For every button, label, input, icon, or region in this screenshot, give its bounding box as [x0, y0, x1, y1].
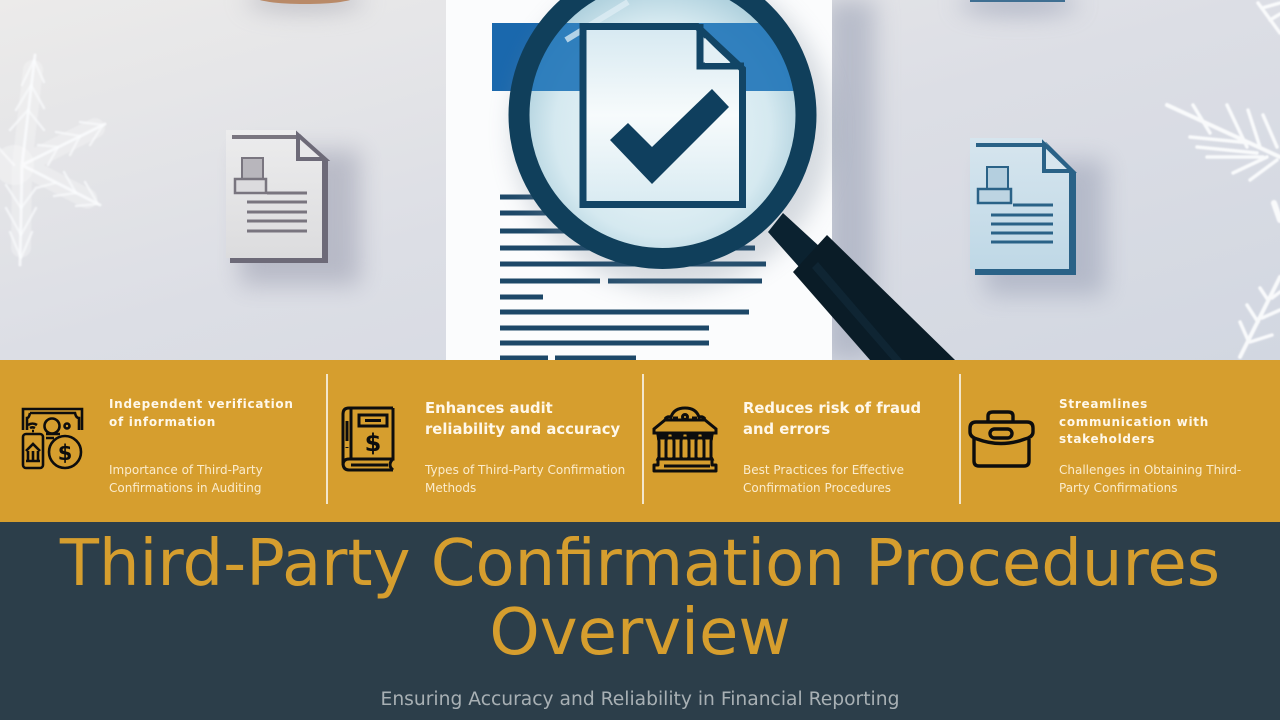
- card 4 heading: stakeholders: [1059, 432, 1155, 446]
- card 1 heading: [109, 397, 294, 428]
- card 4 description: Challenges in Obtaining Third-: [1059, 463, 1241, 477]
- magnifying glass: [500, 0, 955, 360]
- card 2 heading: [425, 400, 620, 438]
- icon: ledger book with dollar: [342, 406, 394, 472]
- card 2 heading: reliability and accuracy: [425, 421, 620, 438]
- card 2 description: Types of Third-Party Confirmation: [425, 463, 625, 477]
- card 3 description: Confirmation Procedures: [743, 481, 891, 495]
- title: Overview: [489, 596, 791, 670]
- divider 3: [959, 374, 961, 504]
- paper shadow: [825, 0, 875, 360]
- card 1 description: [109, 463, 263, 495]
- icon: money, phone and coin: $: [58, 441, 72, 465]
- card 3 description: Best Practices for Effective: [743, 463, 904, 477]
- central report page: [446, 0, 832, 360]
- card 3 heading: [743, 400, 921, 438]
- card 4 heading: communication with: [1059, 414, 1209, 428]
- card 3 description: [743, 463, 904, 495]
- icon: money, phone and coin: [22, 408, 84, 470]
- check mark: [610, 89, 729, 184]
- icon: ledger book with dollar: $: [365, 429, 381, 457]
- panel: title band: [0, 522, 1280, 720]
- card 3 heading: Reduces risk of fraud: [743, 400, 921, 417]
- card 4 heading: Streamlines: [1059, 397, 1148, 411]
- branches right: [1167, 3, 1280, 357]
- divider 2: [642, 374, 644, 504]
- page text lines: [500, 197, 766, 358]
- panel: gold feature band: [0, 360, 1280, 522]
- page header bar: [492, 23, 612, 91]
- card 1 heading: Independent verification: [109, 397, 294, 411]
- small document right: [970, 138, 1105, 295]
- snowflake left: [0, 55, 105, 265]
- card 2 heading: Enhances audit: [425, 400, 553, 417]
- card 4 heading: [1059, 397, 1209, 446]
- card 2 description: Methods: [425, 481, 476, 495]
- title: [60, 527, 1220, 670]
- subtitle: Ensuring Accuracy and Reliability in Financial Reporting: [381, 689, 899, 710]
- top partial shapes: [245, 0, 1078, 14]
- card 4 description: [1059, 463, 1241, 495]
- lens: [522, 0, 802, 255]
- card 2 description: [424, 463, 625, 495]
- hero image: document under magnifying glass: [0, 0, 1280, 360]
- card 1 heading: of information: [109, 414, 216, 428]
- small document left: [226, 130, 360, 285]
- card 3 heading: and errors: [743, 421, 830, 438]
- title: Third-Party Confirmation Procedures: [60, 527, 1220, 601]
- divider 1: [326, 374, 328, 504]
- icon: briefcase: [968, 410, 1035, 468]
- icon: bank building: [652, 406, 718, 472]
- card 1 description: Importance of Third-Party: [109, 463, 263, 477]
- lens ring: [519, 0, 806, 258]
- card 1 description: Confirmations in Auditing: [109, 481, 261, 495]
- handle: [768, 213, 820, 268]
- card 4 description: Party Confirmations: [1059, 481, 1178, 495]
- document in lens: [583, 26, 742, 204]
